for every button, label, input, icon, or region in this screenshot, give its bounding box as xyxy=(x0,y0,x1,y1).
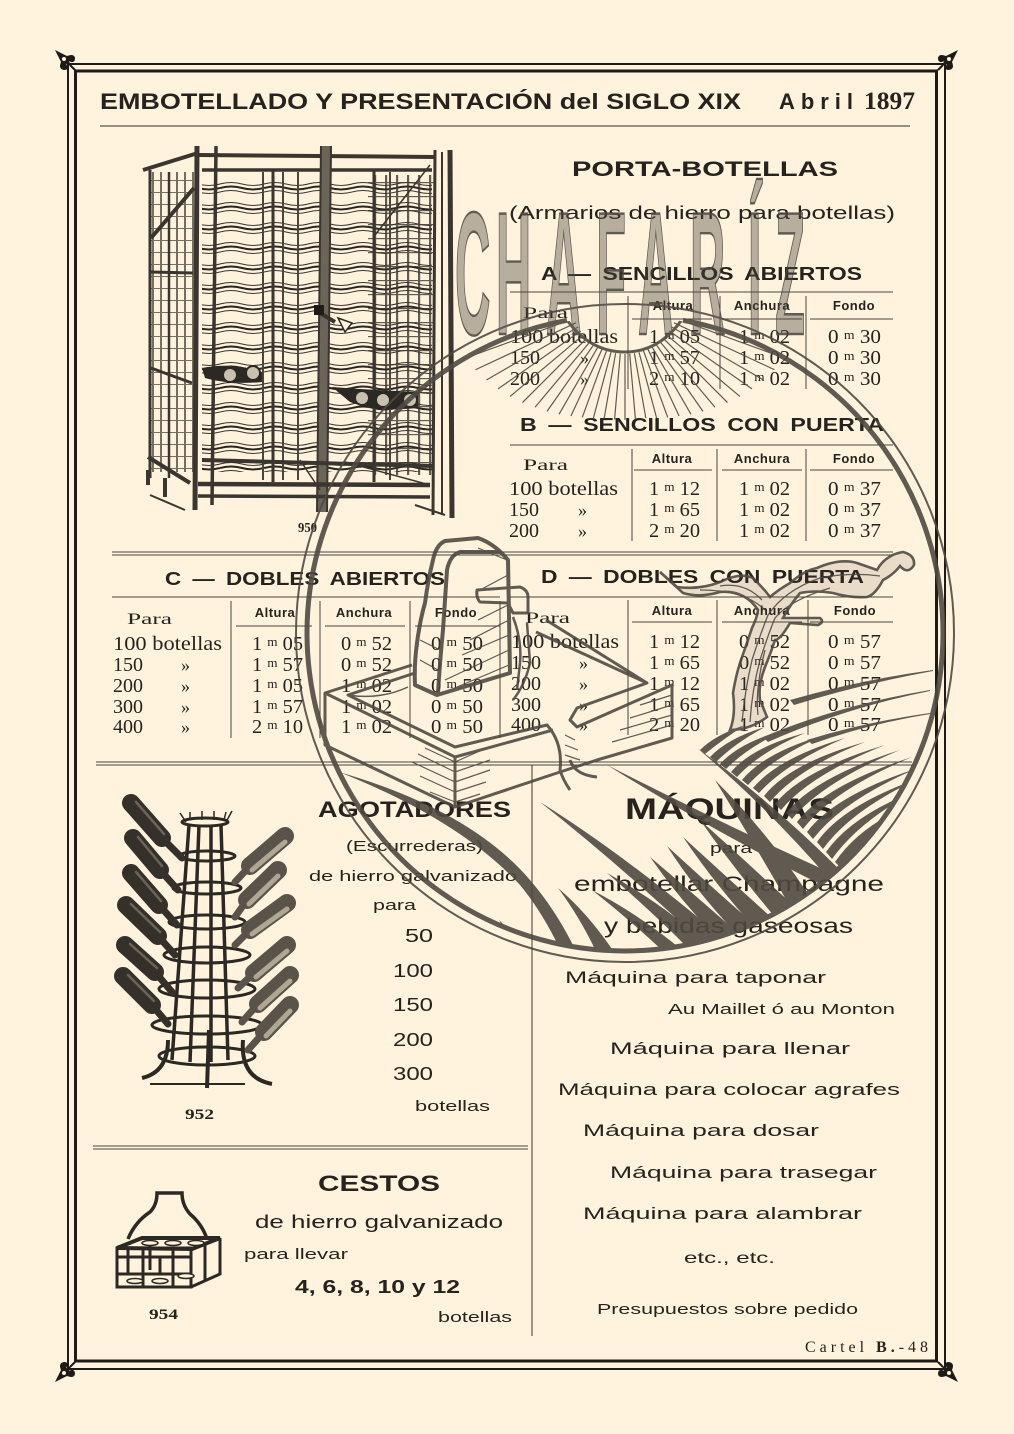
table B: sencillos con puerta: 1 xyxy=(739,478,749,500)
table C: dobles abiertos: » xyxy=(181,655,190,675)
table B: sencillos con puerta: 12 xyxy=(680,478,700,500)
figure number 950: 950 xyxy=(298,521,317,536)
table A: sencillos abiertos: 1 xyxy=(649,347,659,369)
table A: sencillos abiertos: 200 xyxy=(510,368,540,390)
table A: sencillos abiertos: 1 xyxy=(649,326,659,348)
section: maquinas heading: y bebidas gaseosas xyxy=(604,915,853,938)
table A: sencillos abiertos: 57 xyxy=(680,347,700,369)
table B: sencillos con puerta: 02 xyxy=(770,478,790,500)
table A: sencillos abiertos xyxy=(510,264,893,390)
page frame border xyxy=(68,64,945,1369)
table C: dobles abiertos: m xyxy=(267,655,278,670)
figure number 952: 952 xyxy=(185,1107,214,1123)
table D: dobles con puerta: m xyxy=(754,715,765,730)
table A: sencillos abiertos: 0 xyxy=(828,347,838,369)
table D: dobles con puerta: 300 xyxy=(511,694,541,716)
table B: sencillos con puerta: m xyxy=(664,479,675,494)
table B: sencillos con puerta: 65 xyxy=(680,499,700,521)
table D: dobles con puerta: 57 xyxy=(860,652,881,674)
heading: porta-botellas: PORTA-BOTELLAS xyxy=(572,158,838,181)
table D: dobles con puerta: m xyxy=(844,632,855,647)
table D: dobles con puerta: Anchura xyxy=(734,603,790,618)
table C: dobles abiertos: 1 xyxy=(341,675,351,697)
table C: dobles abiertos: m xyxy=(267,717,278,732)
section: agotadores: 100 xyxy=(393,961,433,981)
table C: dobles abiertos: 200 xyxy=(113,675,143,697)
list of machines: Máquina para trasegar xyxy=(610,1163,878,1182)
table A: sencillos abiertos: m xyxy=(664,369,675,384)
table D: dobles con puerta: m xyxy=(664,632,675,647)
table A: sencillos abiertos: » xyxy=(580,369,589,389)
table D: dobles con puerta: » xyxy=(579,674,588,694)
table C: dobles abiertos: 52 xyxy=(372,633,392,655)
table D: dobles con puerta: 1 xyxy=(649,631,659,653)
table A: sencillos abiertos: m xyxy=(664,327,675,342)
table C: dobles abiertos: 1 xyxy=(341,696,351,718)
table B: sencillos con puerta: 37 xyxy=(860,499,881,521)
illustration: bottle drying rack xyxy=(123,802,290,1088)
table C: dobles abiertos: 02 xyxy=(372,675,392,697)
table C: dobles abiertos: 10 xyxy=(283,716,303,738)
table A: sencillos abiertos: A — SENCILLOS ABIERTOS xyxy=(541,264,862,284)
list of machines: Máquina para llenar xyxy=(610,1039,851,1058)
table C: dobles abiertos: 0 xyxy=(431,696,441,718)
table C: dobles abiertos: 300 xyxy=(113,696,143,718)
table B: sencillos con puerta: 1 xyxy=(739,499,749,521)
section: agotadores: AGOTADORES xyxy=(318,797,511,822)
header title: EMBOTELLADO Y PRESENTACIÓN del SIGLO XIX xyxy=(100,89,741,114)
table C: dobles abiertos: 0 xyxy=(341,654,351,676)
table D: dobles con puerta: D — DOBLES CON PUERTA xyxy=(541,567,864,587)
table A: sencillos abiertos: Fondo xyxy=(833,298,875,313)
table A: sencillos abiertos: 0 xyxy=(828,368,838,390)
section: maquinas heading: MÁQUINAS xyxy=(625,792,834,826)
table D: dobles con puerta: 1 xyxy=(649,652,659,674)
table C: dobles abiertos: m xyxy=(447,676,457,691)
logo fountain hatching xyxy=(412,548,672,802)
table C: dobles abiertos: m xyxy=(447,655,457,670)
illustration: wire bottle basket xyxy=(117,1193,220,1287)
table D: dobles con puerta: » xyxy=(579,695,588,715)
table D: dobles con puerta: 0 xyxy=(828,673,838,695)
list of machines: Presupuestos sobre pedido xyxy=(597,1301,858,1318)
table B: sencillos con puerta: 150 xyxy=(509,499,539,521)
table D: dobles con puerta: 2 xyxy=(649,714,659,736)
section: agotadores xyxy=(309,797,517,1115)
section: agotadores: (Escurrederas) xyxy=(346,838,483,855)
logo ring xyxy=(296,304,954,962)
table B: sencillos con puerta: Fondo xyxy=(833,451,875,466)
table D: dobles con puerta: m xyxy=(844,674,855,689)
table A: sencillos abiertos: m xyxy=(844,369,855,384)
table D: dobles con puerta: 65 xyxy=(680,652,700,674)
table D: dobles con puerta: 02 xyxy=(770,694,790,716)
table C: dobles abiertos: Altura xyxy=(255,605,296,620)
table D: dobles con puerta: 100 botellas xyxy=(511,631,619,653)
table C: dobles abiertos: m xyxy=(447,634,457,649)
section: cestos: 4, 6, 8, 10 y 12 xyxy=(295,1277,460,1297)
list of machines: Máquina para taponar xyxy=(565,968,827,987)
table B: sencillos con puerta: m xyxy=(754,500,765,515)
table D: dobles con puerta: 0 xyxy=(828,631,838,653)
table B: sencillos con puerta: 37 xyxy=(860,478,881,500)
table C: dobles abiertos: 0 xyxy=(431,633,441,655)
table A: sencillos abiertos: m xyxy=(754,327,765,342)
table D: dobles con puerta: m xyxy=(754,674,765,689)
table C: dobles abiertos: 1 xyxy=(341,716,351,738)
table C: dobles abiertos: 1 xyxy=(252,696,262,718)
table C: dobles abiertos: m xyxy=(267,676,278,691)
table C: dobles abiertos: m xyxy=(447,697,457,712)
table B: sencillos con puerta: Para xyxy=(523,457,568,474)
table B: sencillos con puerta xyxy=(509,415,893,542)
footer reference: Cartel B.-48 xyxy=(805,1339,928,1356)
table D: dobles con puerta: m xyxy=(664,715,675,730)
table A: sencillos abiertos: 05 xyxy=(680,326,700,348)
table C: dobles abiertos: 02 xyxy=(372,696,392,718)
table C: dobles abiertos: 05 xyxy=(283,633,303,655)
logo ploughed fields xyxy=(339,670,933,962)
table D: dobles con puerta: 400 xyxy=(511,714,541,736)
table C: dobles abiertos: Anchura xyxy=(336,605,392,620)
table B: sencillos con puerta: 20 xyxy=(680,520,700,542)
table B: sencillos con puerta: Altura xyxy=(652,451,693,466)
table B: sencillos con puerta: 2 xyxy=(649,520,659,542)
table C: dobles abiertos: 0 xyxy=(431,654,441,676)
table D: dobles con puerta: 12 xyxy=(680,673,700,695)
table D: dobles con puerta: 0 xyxy=(828,694,838,716)
table A: sencillos abiertos: m xyxy=(754,369,765,384)
section: cestos: botellas xyxy=(438,1309,512,1326)
table D: dobles con puerta: m xyxy=(754,653,765,668)
section divider rules xyxy=(93,552,912,1336)
figure number 954: 954 xyxy=(149,1307,179,1323)
list of machines: Máquina para alambrar xyxy=(583,1204,863,1223)
header title: Abril xyxy=(779,89,853,114)
table D: dobles con puerta: m xyxy=(844,653,855,668)
table D: dobles con puerta: 0 xyxy=(828,652,838,674)
table C: dobles abiertos: 0 xyxy=(341,633,351,655)
table B: sencillos con puerta: 02 xyxy=(770,520,790,542)
section: agotadores: de hierro galvanizado xyxy=(309,868,517,885)
list of machines: etc., etc. xyxy=(684,1250,775,1267)
heading: porta-botellas xyxy=(509,158,895,223)
table C: dobles abiertos: 05 xyxy=(283,675,303,697)
table A: sencillos abiertos: 1 xyxy=(739,326,749,348)
section: agotadores: para xyxy=(373,897,417,914)
table D: dobles con puerta: 1 xyxy=(649,694,659,716)
table C: dobles abiertos: m xyxy=(267,697,278,712)
table B: sencillos con puerta: 02 xyxy=(770,499,790,521)
table D: dobles con puerta: 02 xyxy=(770,673,790,695)
table C: dobles abiertos: m xyxy=(356,655,367,670)
table B: sencillos con puerta: m xyxy=(664,500,675,515)
table A: sencillos abiertos: 150 xyxy=(510,347,540,369)
logo sun and rays xyxy=(475,320,776,420)
table C: dobles abiertos: 50 xyxy=(462,654,483,676)
cabinet bottle ends and lock xyxy=(202,305,418,409)
table A: sencillos abiertos: 0 xyxy=(828,326,838,348)
table A: sencillos abiertos: 30 xyxy=(860,326,881,348)
table D: dobles con puerta: 150 xyxy=(511,652,541,674)
table A: sencillos abiertos: 100 botellas xyxy=(510,326,618,348)
list of machines: Máquina para dosar xyxy=(583,1121,820,1140)
table D: dobles con puerta: m xyxy=(844,715,855,730)
table C: dobles abiertos: m xyxy=(356,634,367,649)
left bottles xyxy=(123,802,182,1024)
table D: dobles con puerta: 20 xyxy=(680,714,700,736)
logo vine xyxy=(660,552,914,730)
table D: dobles con puerta: Altura xyxy=(652,603,693,618)
table A: sencillos abiertos: Altura xyxy=(653,298,694,313)
table A: sencillos abiertos: m xyxy=(844,327,855,342)
table B: sencillos con puerta: 37 xyxy=(860,520,881,542)
section: cestos: de hierro galvanizado xyxy=(255,1212,503,1232)
table A: sencillos abiertos: Anchura xyxy=(734,298,790,313)
table C: dobles abiertos: m xyxy=(447,717,457,732)
table A: sencillos abiertos: m xyxy=(664,348,675,363)
table D: dobles con puerta: m xyxy=(844,695,855,710)
table A: sencillos abiertos: 2 xyxy=(649,368,659,390)
table B: sencillos con puerta: m xyxy=(754,479,765,494)
table D: dobles con puerta: 0 xyxy=(828,714,838,736)
table C: dobles abiertos: 100 botellas xyxy=(113,633,222,655)
table A: sencillos abiertos: Para xyxy=(523,305,568,322)
table D: dobles con puerta: » xyxy=(579,715,588,735)
table A: sencillos abiertos: 1 xyxy=(739,347,749,369)
table D: dobles con puerta: 1 xyxy=(739,673,749,695)
table C: dobles abiertos: 1 xyxy=(252,633,262,655)
table A: sencillos abiertos: 02 xyxy=(770,326,790,348)
table C: dobles abiertos: Para xyxy=(127,611,172,628)
right bottles xyxy=(235,836,290,1050)
table D: dobles con puerta: m xyxy=(664,653,675,668)
table B: sencillos con puerta: » xyxy=(578,521,587,541)
table C: dobles abiertos: 50 xyxy=(462,716,483,738)
table C: dobles abiertos: m xyxy=(267,634,278,649)
list of machines: Máquina para colocar agrafes xyxy=(558,1080,900,1099)
table D: dobles con puerta: Fondo xyxy=(834,603,876,618)
table A: sencillos abiertos: 30 xyxy=(860,347,881,369)
table D: dobles con puerta: » xyxy=(579,653,588,673)
table B: sencillos con puerta: 0 xyxy=(828,499,838,521)
table D: dobles con puerta: 52 xyxy=(770,631,790,653)
table C: dobles abiertos xyxy=(112,569,500,738)
table C: dobles abiertos: m xyxy=(356,676,367,691)
table A: sencillos abiertos: 1 xyxy=(739,368,749,390)
table C: dobles abiertos: 50 xyxy=(462,633,483,655)
table C: dobles abiertos: 50 xyxy=(462,696,483,718)
list of machines: Au Maillet ó au Monton xyxy=(668,1001,895,1018)
table D: dobles con puerta: 52 xyxy=(770,652,790,674)
table A: sencillos abiertos: m xyxy=(844,348,855,363)
table C: dobles abiertos: » xyxy=(181,676,190,696)
section: agotadores: 200 xyxy=(393,1030,433,1050)
table B: sencillos con puerta: 0 xyxy=(828,478,838,500)
table D: dobles con puerta: Para xyxy=(525,610,570,627)
section: cestos: CESTOS xyxy=(318,1171,440,1196)
table C: dobles abiertos: 02 xyxy=(372,716,392,738)
section: maquinas heading: embotellar Champagne xyxy=(574,873,884,896)
table C: dobles abiertos: Fondo xyxy=(435,605,477,620)
table D: dobles con puerta: 0 xyxy=(739,652,749,674)
table D: dobles con puerta: 1 xyxy=(739,694,749,716)
table C: dobles abiertos: 1 xyxy=(252,675,262,697)
table A: sencillos abiertos: 10 xyxy=(680,368,700,390)
table B: sencillos con puerta: B — SENCILLOS CON PUERTA xyxy=(520,415,884,435)
table C: dobles abiertos: m xyxy=(356,717,367,732)
table B: sencillos con puerta: Anchura xyxy=(734,451,790,466)
table B: sencillos con puerta: m xyxy=(664,521,675,536)
table A: sencillos abiertos: 30 xyxy=(860,368,881,390)
section: cestos: para llevar xyxy=(244,1246,348,1263)
table C: dobles abiertos: 400 xyxy=(113,716,143,738)
table A: sencillos abiertos: » xyxy=(580,348,589,368)
table C: dobles abiertos: 1 xyxy=(252,654,262,676)
table B: sencillos con puerta: m xyxy=(844,479,855,494)
table C: dobles abiertos: 0 xyxy=(431,675,441,697)
logo wordmark: CHAFARÍZ xyxy=(455,177,805,372)
section: cestos xyxy=(244,1171,512,1326)
table D: dobles con puerta: 200 xyxy=(511,673,541,695)
table B: sencillos con puerta: 1 xyxy=(649,478,659,500)
table C: dobles abiertos: 2 xyxy=(252,716,262,738)
table D: dobles con puerta: 57 xyxy=(860,714,881,736)
section: maquinas heading: para xyxy=(710,840,753,857)
table C: dobles abiertos: » xyxy=(181,697,190,717)
table C: dobles abiertos: » xyxy=(181,717,190,737)
table D: dobles con puerta: 57 xyxy=(860,673,881,695)
table D: dobles con puerta: 65 xyxy=(680,694,700,716)
table D: dobles con puerta: m xyxy=(664,695,675,710)
table B: sencillos con puerta: 0 xyxy=(828,520,838,542)
header title: 1897 xyxy=(864,88,915,115)
table B: sencillos con puerta: 1 xyxy=(649,499,659,521)
logo fountain trough xyxy=(325,538,672,807)
table D: dobles con puerta: 57 xyxy=(860,631,881,653)
table C: dobles abiertos: 57 xyxy=(283,654,303,676)
table B: sencillos con puerta: m xyxy=(754,521,765,536)
table C: dobles abiertos: 0 xyxy=(431,716,441,738)
table D: dobles con puerta: m xyxy=(754,695,765,710)
table C: dobles abiertos: 57 xyxy=(283,696,303,718)
table A: sencillos abiertos: 02 xyxy=(770,368,790,390)
section: agotadores: 300 xyxy=(393,1064,433,1084)
table D: dobles con puerta: 1 xyxy=(739,714,749,736)
table B: sencillos con puerta: m xyxy=(844,500,855,515)
table D: dobles con puerta: 1 xyxy=(649,673,659,695)
table D: dobles con puerta: m xyxy=(664,674,675,689)
section: maquinas heading xyxy=(574,792,884,938)
table B: sencillos con puerta: m xyxy=(844,521,855,536)
illustration: iron bottle cabinet xyxy=(143,146,452,518)
list of machines xyxy=(558,968,900,1318)
table C: dobles abiertos: 150 xyxy=(113,654,143,676)
table D: dobles con puerta: 02 xyxy=(770,714,790,736)
table D: dobles con puerta: 12 xyxy=(680,631,700,653)
table B: sencillos con puerta: » xyxy=(578,500,587,520)
section: agotadores: botellas xyxy=(415,1098,490,1115)
table D: dobles con puerta: 57 xyxy=(860,694,881,716)
table C: dobles abiertos: C — DOBLES ABIERTOS xyxy=(165,569,445,589)
table C: dobles abiertos: 52 xyxy=(372,654,392,676)
table B: sencillos con puerta: 200 xyxy=(509,520,539,542)
header title xyxy=(100,88,915,126)
section: agotadores: 50 xyxy=(405,926,433,946)
table C: dobles abiertos: m xyxy=(356,697,367,712)
section: agotadores: 150 xyxy=(393,995,433,1015)
table B: sencillos con puerta: 1 xyxy=(739,520,749,542)
table A: sencillos abiertos: m xyxy=(754,348,765,363)
table C: dobles abiertos: 50 xyxy=(462,675,483,697)
table D: dobles con puerta: m xyxy=(754,632,765,647)
heading: porta-botellas: (Armarios de hierro para botellas) xyxy=(509,203,895,223)
table D: dobles con puerta: 0 xyxy=(739,631,749,653)
watermark logo: Chafariz xyxy=(296,177,954,962)
table B: sencillos con puerta: 100 botellas xyxy=(509,478,618,500)
table A: sencillos abiertos: 02 xyxy=(770,347,790,369)
table D: dobles con puerta xyxy=(500,567,893,738)
